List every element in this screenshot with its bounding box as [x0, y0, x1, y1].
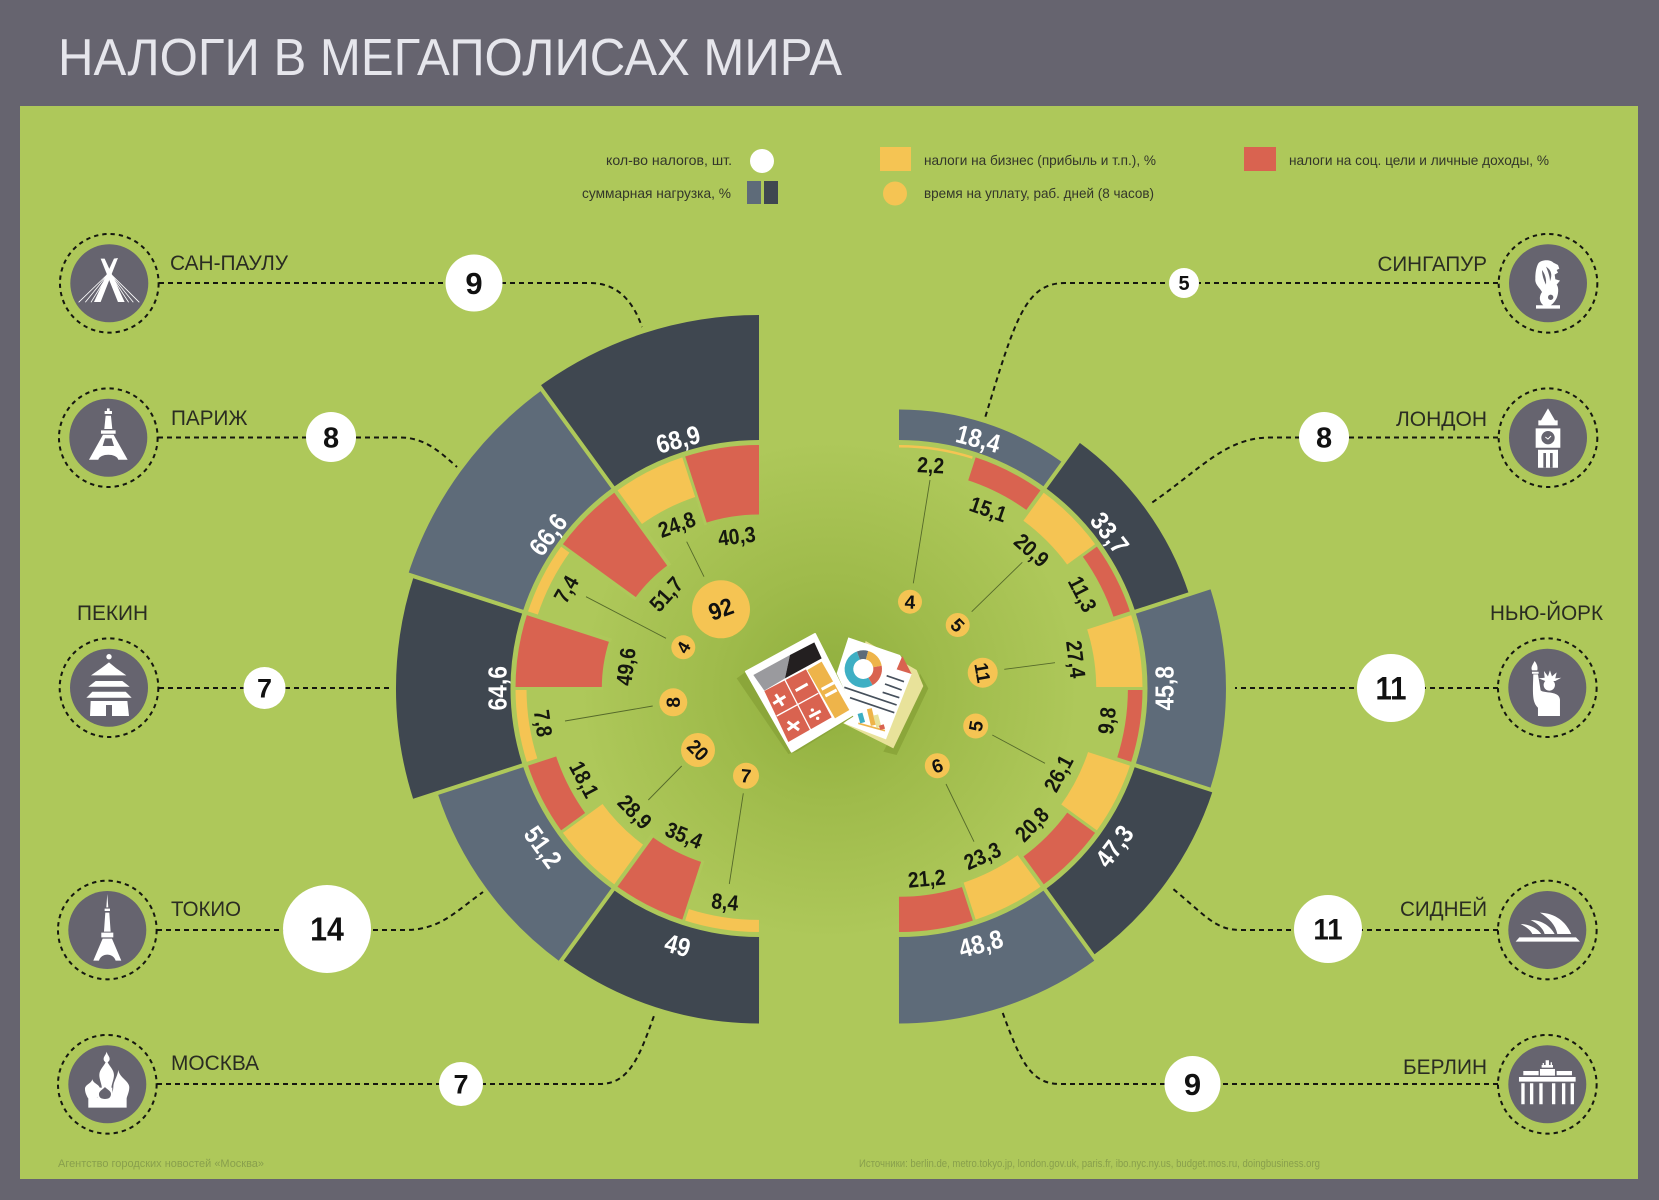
icon: São Paulo bridge	[60, 234, 159, 333]
city: London	[1299, 388, 1597, 487]
count: 14 taxes: 14	[310, 910, 344, 948]
bubble: Sydney 5 days	[963, 714, 988, 738]
tax component values: 40,3	[717, 522, 757, 551]
bubble: Paris 4 days: 4	[673, 638, 695, 657]
bubble: Berlin 6 days: 6	[929, 755, 946, 779]
bubble: Sydney 5 days: 5	[966, 719, 988, 733]
city: Moscow	[58, 1035, 483, 1134]
city: São Paulo	[60, 234, 502, 333]
count: 5 taxes	[1169, 268, 1199, 298]
icon: St Basil's domes	[58, 1035, 157, 1134]
count: 5 taxes: 5	[1178, 273, 1190, 295]
icon: Merlion	[1499, 234, 1597, 333]
count: 11 taxes: 11	[1375, 670, 1407, 707]
report paper	[837, 637, 928, 755]
tax component values: 21,2	[907, 865, 947, 893]
legend: total burden	[582, 181, 778, 204]
Sydney total sector	[1030, 751, 1213, 975]
tax component values: 35,4	[662, 817, 706, 854]
tax component values: 27,4	[1061, 639, 1090, 680]
tax component values: 20,9	[1009, 529, 1053, 572]
tax component values: 26,1	[1039, 751, 1079, 796]
total burden values: 66,6	[524, 509, 574, 562]
city: Sydney	[1294, 881, 1597, 979]
count: 9 taxes	[1164, 1056, 1220, 1112]
icon: Eiffel tower	[59, 388, 158, 487]
legend: social and personal taxes: налоги на соц. цели и личные доходы, %	[1289, 152, 1549, 168]
legend	[582, 147, 1549, 206]
count: 11 taxes: 11	[1313, 913, 1343, 947]
city: Paris	[59, 388, 356, 487]
tax component values: 23,3	[960, 838, 1005, 875]
tax component values: 7,8	[528, 708, 556, 738]
bubble: Moscow 7 days: 7	[740, 766, 752, 788]
New York total sector	[1090, 587, 1269, 809]
Moscow total sector	[562, 851, 800, 1075]
count: 8 taxes: 8	[323, 422, 339, 454]
count: 8 taxes	[306, 412, 356, 462]
total burden values: 18,4	[953, 420, 1003, 459]
tax component values: 20,8	[1010, 803, 1054, 847]
label: Beijing: ПЕКИН	[77, 602, 148, 625]
total burden values: 64,6	[484, 666, 513, 711]
bubble: Singapore 4 days	[898, 590, 922, 614]
chart: right half, tax component sectors	[889, 438, 1218, 964]
total burden values: 68,9	[653, 421, 704, 460]
total burden values: 49	[661, 929, 693, 964]
bubble: New York 11 days	[968, 658, 998, 688]
icon: Temple of Heaven	[60, 638, 158, 737]
label: Paris: ПАРИЖ	[171, 407, 248, 430]
icon: Brandenburg Gate	[1498, 1035, 1597, 1134]
tax component values: 2,2	[917, 453, 945, 479]
count: 9 taxes	[446, 254, 502, 312]
count: 9 taxes: 9	[465, 266, 483, 301]
label: Tokyo: ТОКИО	[171, 898, 241, 921]
count: 8 taxes	[1299, 412, 1349, 462]
city: Singapore	[1169, 234, 1597, 333]
tax component values: 11,3	[1063, 573, 1101, 616]
total burden values: 45,8	[1151, 666, 1180, 711]
total burden values: 33,7	[1084, 507, 1134, 560]
count: 14 taxes	[283, 885, 371, 973]
city: Berlin	[1164, 1035, 1597, 1134]
tax component values: 9,8	[1094, 706, 1121, 736]
time to pay bubbles	[659, 580, 998, 789]
bubble: Singapore 4 days: 4	[904, 592, 916, 614]
thin leader lines	[565, 480, 1055, 884]
Paris total sector	[367, 390, 641, 653]
London total sector	[1017, 442, 1223, 631]
legend: number of taxes: кол-во налогов, шт.	[606, 152, 732, 168]
count: 7 taxes	[244, 667, 286, 709]
legend: business taxes	[880, 147, 1156, 171]
count: 7 taxes: 7	[453, 1070, 469, 1100]
total burden values: 47,3	[1090, 820, 1140, 873]
chart: left half, tax component sectors	[398, 381, 763, 968]
total burden values	[484, 420, 1180, 964]
icon: Statue of Liberty	[1498, 638, 1597, 737]
tax component values: 49,6	[612, 647, 641, 687]
bubble: Berlin 6 days	[925, 753, 950, 779]
central glow	[579, 440, 1079, 940]
title: НАЛОГИ В МЕГАПОЛИСАХ МИРА	[58, 29, 842, 87]
bubble: Moscow 7 days	[733, 763, 759, 789]
label: London: ЛОНДОН	[1396, 408, 1487, 431]
chart: left half, total burden sectors	[348, 315, 800, 1075]
tax component values: 51,7	[645, 572, 688, 617]
bubble: Beijing 8 days: 8	[664, 697, 685, 708]
bubble: Beijing 8 days	[659, 688, 687, 716]
legend: business taxes: налоги на бизнес (прибыль и т.п.), %	[924, 152, 1156, 168]
total burden values: 48,8	[956, 925, 1006, 964]
icon: Sydney Opera House	[1498, 881, 1597, 979]
bubble: London 5 days: 5	[946, 615, 968, 637]
tax component values: 24,8	[655, 507, 699, 543]
Berlin total sector	[858, 851, 1096, 1075]
legend: number of taxes	[606, 149, 774, 173]
label: Singapore: СИНГАПУР	[1378, 253, 1487, 276]
footer: agency credit: Агентство городских новостей «Москва»	[58, 1158, 264, 1170]
count: 7 taxes: 7	[257, 674, 272, 704]
bubble: Tokyo 20 days: 20	[682, 736, 712, 766]
Beijing total sector	[348, 576, 568, 829]
footer: sources: Источники: berlin.de, metro.tokyo.jp, london.gov.uk, paris.fr, ibo.nyc.ny.us, budget.mos.ru, doingbusiness.org	[859, 1158, 1320, 1170]
label: São Paulo: САН-ПАУЛУ	[170, 252, 289, 275]
legend: total burden: суммарная нагрузка, %	[582, 185, 731, 201]
count: 9 taxes: 9	[1184, 1067, 1201, 1102]
city: New York	[1357, 601, 1604, 737]
chart: right half, total burden sectors	[858, 410, 1269, 1075]
bubble: New York 11 days: 11	[969, 661, 994, 685]
label: Moscow: МОСКВА	[171, 1052, 259, 1075]
label: Sydney: СИДНЕЙ	[1400, 897, 1487, 921]
icon: Tokyo tower	[58, 881, 157, 979]
tax component values: 8,4	[710, 889, 740, 916]
label: Berlin: БЕРЛИН	[1403, 1056, 1487, 1079]
connector lines	[157, 283, 1498, 1084]
calculator	[737, 634, 855, 754]
bubble: São Paulo 92 days	[692, 580, 750, 638]
icon: Big Ben	[1499, 388, 1597, 487]
legend: time to pay: время на уплату, раб. дней (8 часов)	[924, 185, 1154, 201]
tax component values: 28,9	[612, 790, 656, 834]
count: 11 taxes	[1294, 895, 1362, 963]
center icon: calculator and report	[737, 634, 928, 755]
Tokyo total sector	[438, 751, 629, 982]
bubble: São Paulo 92 days: 92	[705, 592, 737, 626]
count: 8 taxes: 8	[1316, 422, 1332, 454]
label: New York: НЬЮ-ЙОРК	[1490, 601, 1604, 625]
tax component values: 7,4	[549, 571, 584, 607]
tax component values: 15,1	[966, 492, 1010, 528]
Singapore total sector	[899, 410, 1063, 488]
city: Tokyo	[58, 881, 371, 979]
tax component values: 18,1	[564, 757, 603, 802]
total burden values: 51,2	[517, 821, 567, 874]
São Paulo total sector	[540, 315, 759, 488]
legend: time to pay	[883, 182, 1154, 206]
count: 7 taxes	[439, 1062, 483, 1106]
tax component values	[528, 453, 1121, 916]
count: 11 taxes	[1357, 654, 1425, 722]
legend: social and personal taxes	[1244, 147, 1549, 171]
city: Beijing	[60, 602, 286, 737]
